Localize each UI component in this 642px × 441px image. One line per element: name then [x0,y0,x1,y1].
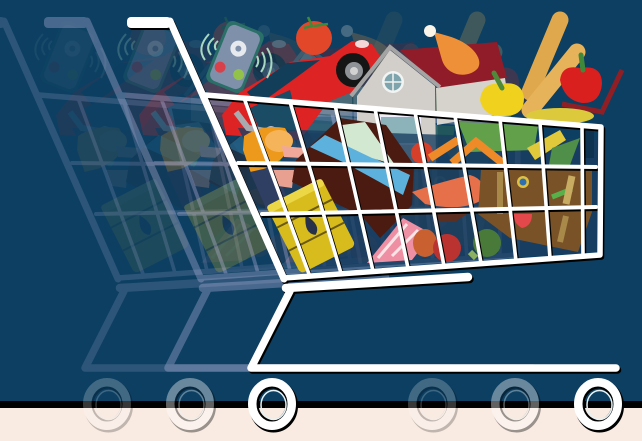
floor strip [0,401,642,441]
cart frame [127,17,616,368]
ghost cart: far motion trail [0,17,456,368]
front wheel [252,382,294,428]
ghost wheels [88,382,454,428]
ghost cart: near motion trail [44,17,539,368]
cart frame shadow [128,19,618,370]
rear wheel [578,382,620,428]
ghost wheels near [170,382,536,428]
cart contents: phone, car, house, food, barrel, suitcase [201,17,622,274]
